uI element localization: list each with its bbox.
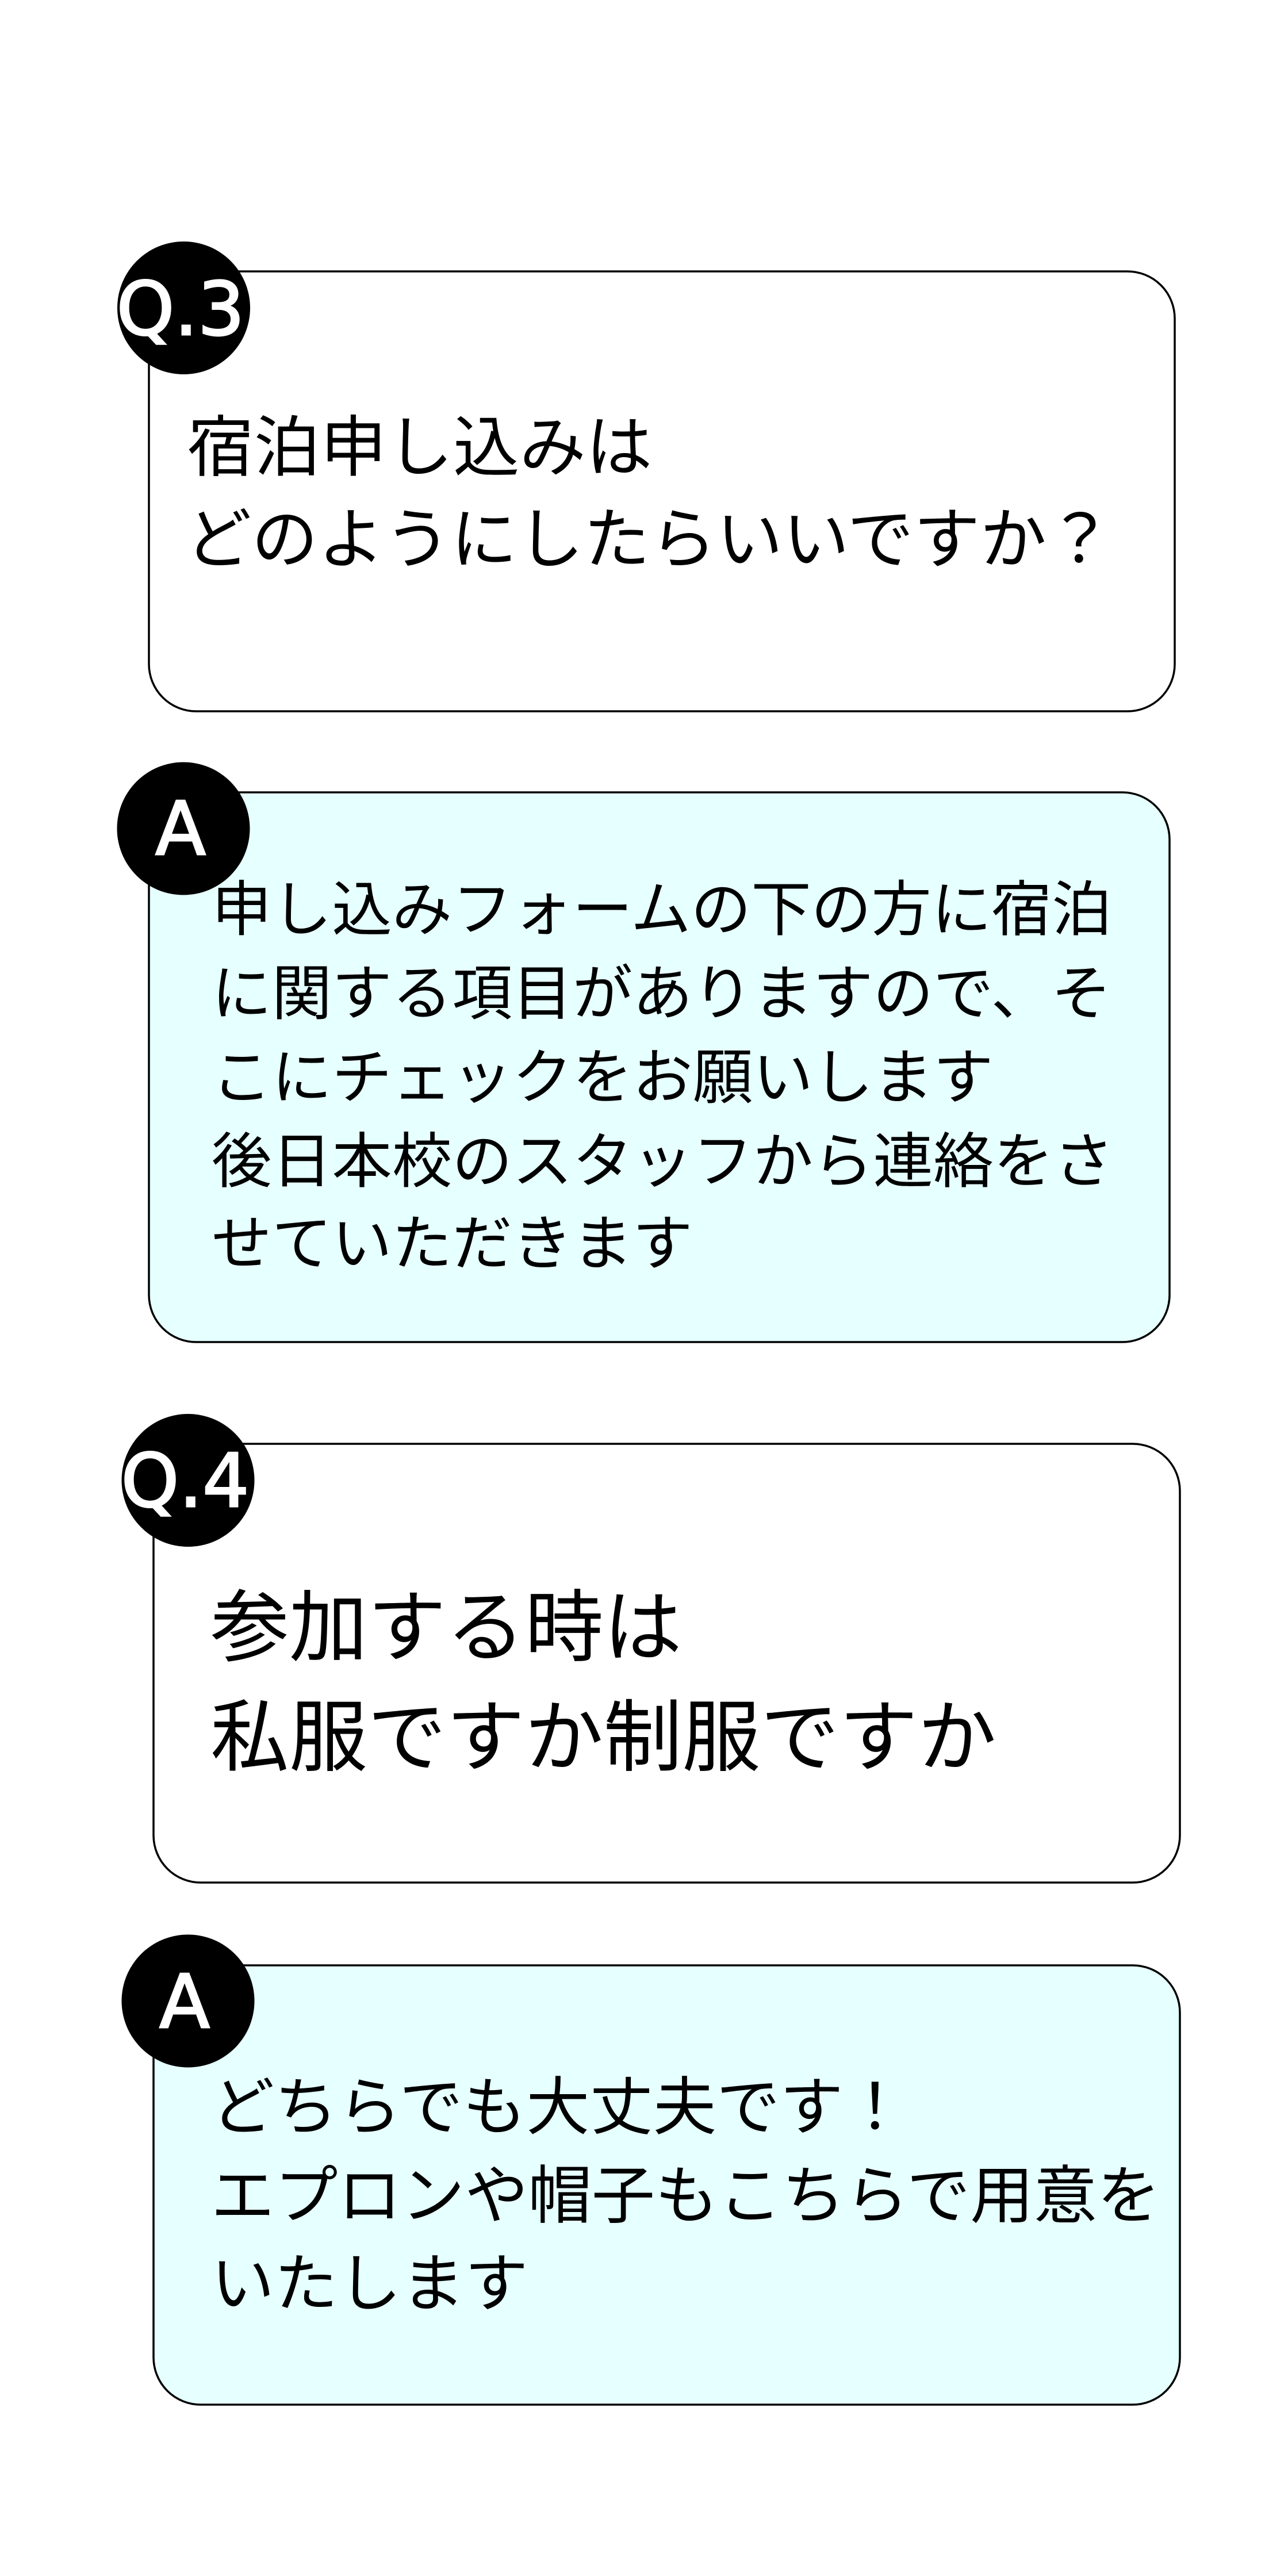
answer 3 text: せていただきます [212,1210,693,1278]
icon: A badge: A [155,787,206,872]
icon: A badge: A [159,1960,210,2045]
question 4 text: 参加する時は [210,1584,682,1672]
answer 3 box [149,792,1170,1342]
question 3 text: どのようにしたらいいですか？ [185,503,1113,577]
panel: answer 4 [122,1934,1180,2405]
answer 3 text [212,876,1114,1278]
question 3 text: 宿泊申し込みは [187,411,652,485]
answer 3 text: 後日本校のスタッフから連絡をさ [212,1128,1114,1195]
panel: question 3 [117,241,1175,711]
answer 3 text: こにチェックをお願いします [212,1044,994,1111]
question 3 text [185,411,1113,577]
icon: A badge [122,1934,254,2068]
answer 4 box [154,1965,1180,2405]
panel: question 4 [121,1414,1180,1883]
question 3 box [149,271,1175,711]
question 4 box [154,1444,1180,1883]
answer 4 text [211,2072,1160,2320]
answer 3 text: に関する項目がありますので、そ [212,960,1111,1028]
answer 4 text: どちらでも大丈夫です！ [211,2072,907,2143]
question 4 text [210,1584,996,1781]
icon: A badge [117,762,250,895]
answer 3 text: 申し込みフォームの下の方に宿泊 [212,876,1112,944]
question 4 text: 私服ですか制服ですか [210,1693,996,1781]
answer 4 text: エプロンや帽子もこちらで用意を [211,2161,1160,2232]
icon: Q.3 badge: Q.3 [117,267,244,352]
icon: Q.4 badge [121,1414,254,1547]
answer 4 text: いたします [211,2249,528,2320]
icon: Q.3 badge [117,241,250,374]
icon: Q.4 badge: Q.4 [121,1439,249,1524]
panel: answer 3 [117,762,1170,1342]
